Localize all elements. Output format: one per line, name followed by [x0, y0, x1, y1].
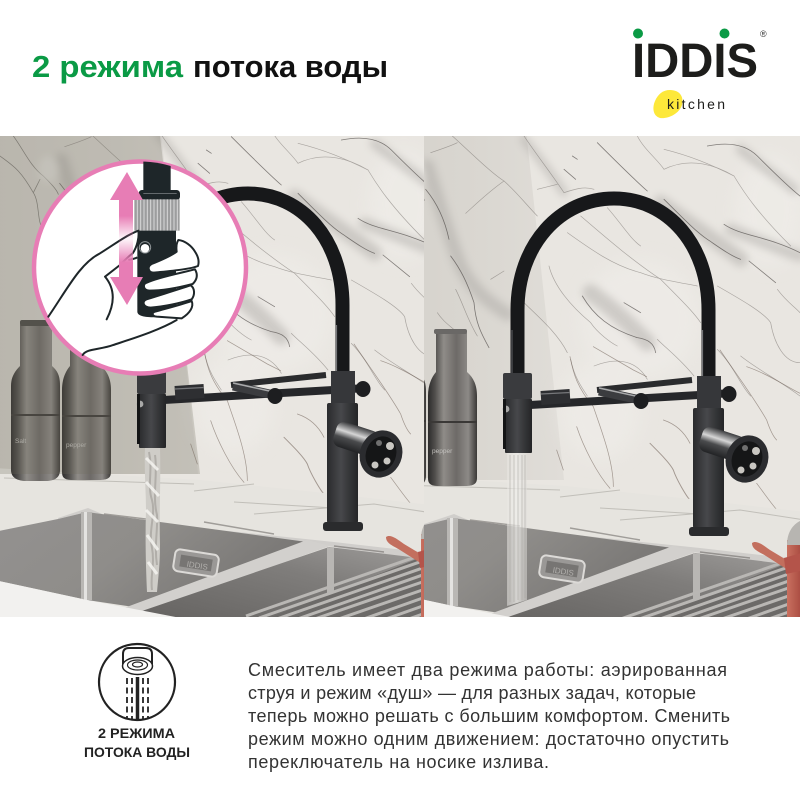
- kitchen backdrop: right: [424, 136, 800, 617]
- logo: IDDIS kitchen: IDDIS: [632, 35, 758, 88]
- faucet: left: [137, 194, 409, 531]
- description text: режим можно одним движением: достаточно опустить: [248, 729, 729, 749]
- callout: hand moving switch: [34, 157, 246, 374]
- kitchen backdrop: left: [0, 124, 441, 626]
- title: [32, 49, 388, 84]
- description text: [248, 660, 730, 772]
- photo panel: right, shower mode: [424, 136, 800, 617]
- callout disc: [34, 162, 246, 374]
- icon caption: 2 РЕЖИМА: [98, 725, 175, 741]
- description text: струя и режим «душ» — для разных задач, которые: [248, 683, 696, 703]
- photo panel: left, single-stream mode: [0, 124, 441, 626]
- wall shadow: left: [0, 136, 200, 474]
- title: потока воды: [193, 49, 388, 84]
- icon caption: [84, 725, 190, 760]
- title: 2 режима: [32, 49, 184, 84]
- water stream: shower spray: [507, 453, 527, 606]
- description text: переключатель на носике излива.: [248, 752, 549, 772]
- logo: IDDIS kitchen: kitchen: [667, 96, 725, 112]
- description text: Смеситель имеет два режима работы: аэрированная: [248, 660, 727, 680]
- water stream: aerated: [145, 448, 160, 592]
- logo: IDDIS kitchen: ®: [760, 29, 767, 39]
- logo: IDDIS kitchen: [632, 28, 767, 118]
- icon caption: ПОТОКА ВОДЫ: [84, 744, 190, 760]
- illustration: spout in hand: [48, 157, 199, 355]
- icon: two flow modes: [99, 644, 175, 720]
- description text: теперь можно решать с большим комфортом. Сменить: [248, 706, 730, 726]
- arrow: up and down: [110, 172, 143, 305]
- faucet: right: [503, 198, 775, 536]
